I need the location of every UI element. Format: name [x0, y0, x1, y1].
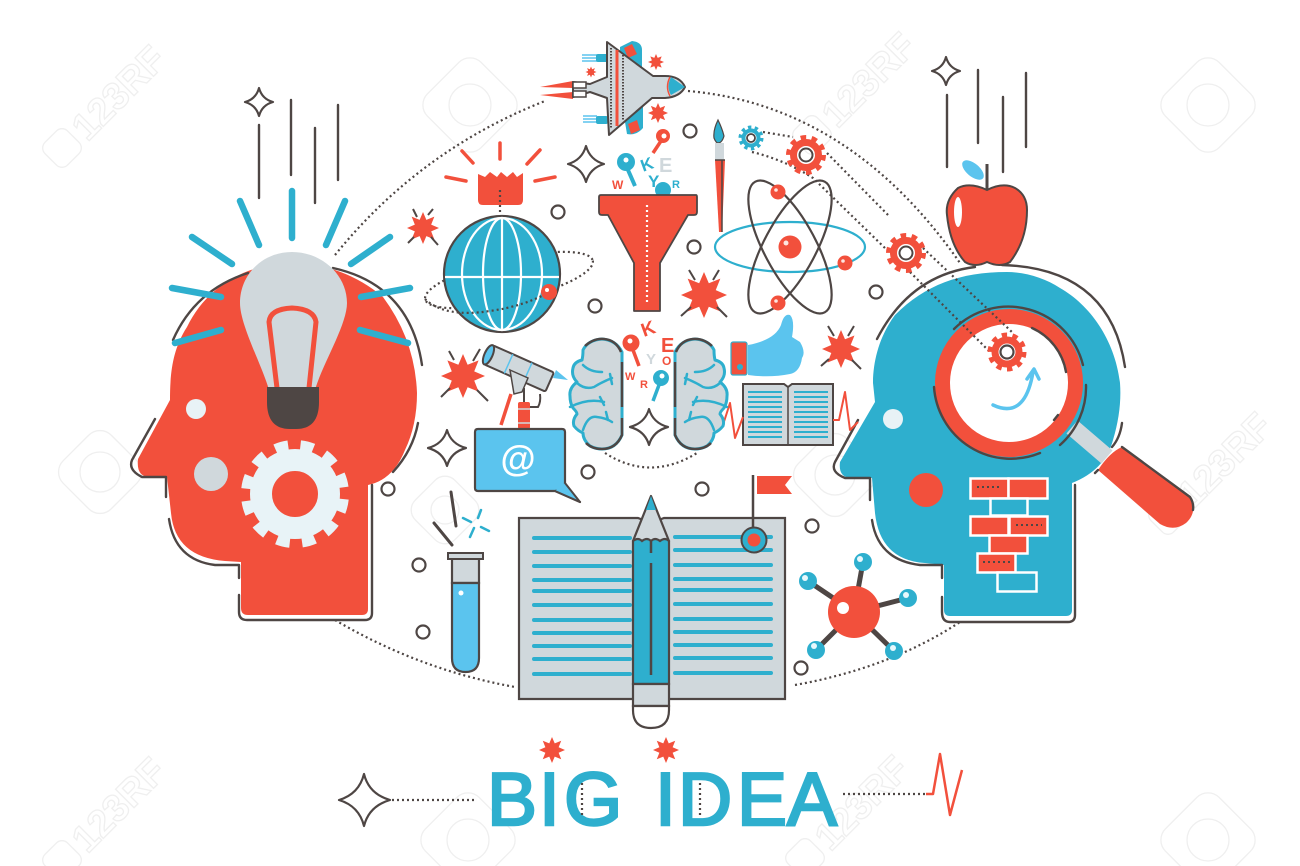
falling letters: K: [638, 153, 657, 176]
left page lines: [534, 538, 630, 674]
funnel with keys and letters: [599, 129, 697, 311]
light bulb: [240, 252, 347, 390]
speech bubble: [475, 429, 580, 502]
left brain: [570, 339, 622, 449]
engine speed lines: [582, 55, 597, 122]
star ornaments: [428, 146, 668, 466]
funnel with keys and letters: W: [612, 178, 624, 192]
keys between brains: [622, 334, 640, 366]
funnel with keys and letters: E: [659, 155, 672, 177]
letters between brains: K: [638, 317, 659, 342]
red crown: [446, 143, 555, 216]
brains: O: [662, 354, 671, 368]
watermark pattern: 123RF: [64, 38, 174, 149]
title left star and dotted line: [339, 774, 475, 826]
brick dots: [977, 487, 1042, 562]
funnel with keys and letters: R: [672, 179, 680, 191]
light rays: [172, 191, 410, 343]
red key top: [653, 129, 670, 153]
burst stars: [407, 209, 861, 401]
fuselage: [573, 42, 685, 135]
title: BIG IDEA: BIG IDEA: [487, 757, 837, 841]
head silhouette: [840, 272, 1120, 616]
head dots: [186, 399, 206, 419]
speech bubble: @: [500, 438, 536, 479]
falling lines and star: left: [245, 88, 338, 203]
molecule: [799, 553, 917, 660]
funnel with keys and letters: Y: [648, 172, 660, 191]
red gear on the right: [888, 236, 924, 270]
head outline strokes: [131, 268, 422, 620]
left red head with light bulb: [131, 191, 422, 620]
blue key: [617, 153, 635, 186]
brick wall: [970, 478, 1048, 592]
rocket stars: [648, 54, 664, 70]
falling lines and star: right: [932, 57, 1026, 172]
brains: W: [625, 371, 636, 383]
brains: E: [661, 335, 674, 357]
dotted connecting oval: [335, 91, 960, 687]
paint brush: [714, 120, 725, 232]
gear in lens: [990, 335, 1024, 369]
title right dotted line and pulse: [843, 754, 962, 815]
telescope: [481, 344, 568, 429]
watermark pattern: 123RF: [1170, 405, 1280, 516]
watermark pattern: 123RF: [814, 25, 924, 136]
magnifier ring: [942, 316, 1076, 450]
bulb filament: [269, 308, 316, 388]
large open book with pencil: [519, 475, 792, 728]
dotted lines into lens: [910, 248, 1013, 352]
head silhouette: [138, 262, 417, 615]
right page lines: [675, 537, 771, 673]
small circles: [382, 124, 882, 674]
head outline strokes: [834, 265, 1125, 622]
bulb base: [267, 387, 319, 429]
gear: [242, 441, 348, 547]
magnifier ring outline: [934, 307, 1086, 459]
watermark pattern: 123RF: [64, 750, 174, 861]
arc under brains: [605, 453, 697, 468]
engine pods: [596, 41, 643, 134]
big red gear: [788, 138, 824, 172]
apple: [947, 157, 1027, 265]
small blue gear: [740, 128, 762, 148]
brains: R: [640, 379, 648, 391]
brains: [570, 317, 727, 468]
test tube: [434, 492, 489, 672]
right blue head with magnifier: [834, 248, 1193, 622]
pulse lines near book: [722, 392, 858, 438]
rocket: [540, 41, 685, 135]
globe with orbit: [420, 216, 598, 332]
watermark pattern: 123RF: [807, 748, 917, 859]
magnifier handle: [1072, 427, 1107, 457]
right brain: [675, 339, 727, 449]
pod red patches: [624, 44, 640, 134]
atom: [715, 169, 865, 325]
title stars: [539, 737, 565, 763]
brains: Y: [646, 351, 656, 368]
thumbs up: [731, 315, 804, 376]
small open book: [743, 384, 833, 446]
flag marker: [742, 475, 792, 552]
flames: [540, 81, 573, 99]
book pages: [519, 518, 785, 699]
pencil: [633, 496, 669, 728]
forehead dots: [883, 409, 903, 429]
extinguisher: [518, 402, 530, 429]
curved arrow: [993, 369, 1039, 409]
